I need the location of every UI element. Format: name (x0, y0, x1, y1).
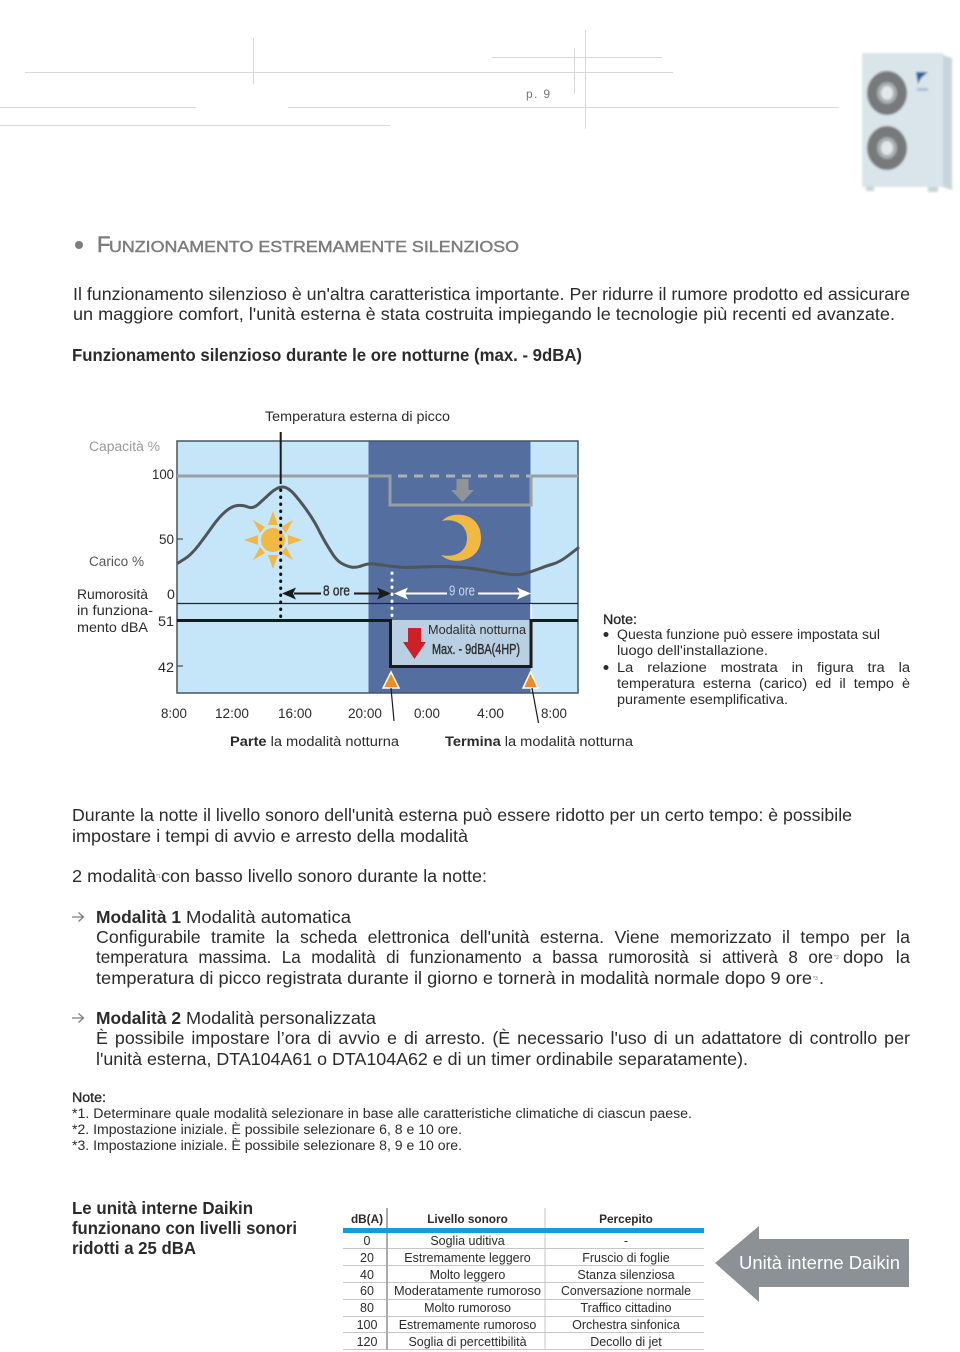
table rows: Soglia di percettibilità (408, 1335, 527, 1349)
table rows: Molto leggero (430, 1268, 505, 1282)
icon: sun (244, 511, 302, 569)
icon: capacity down arrow (451, 479, 474, 502)
axis labels: in funziona- (77, 603, 153, 619)
indoor units heading: funzionano con livelli sonori (72, 1218, 297, 1238)
arrow: 8 hours (282, 584, 391, 600)
night mode label: Modalità notturna (428, 622, 527, 637)
axis labels: Carico % (89, 554, 144, 570)
time axis: 0:00 (414, 706, 440, 722)
night mode label (428, 622, 527, 658)
table rows: 40 (360, 1268, 374, 1282)
time axis (161, 706, 567, 722)
intro paragraph: un maggiore comfort, l'unità esterna è stata costruita impiegando le tecnologie più recenti ed avanzate. (73, 304, 895, 324)
chart notes: Note: (603, 612, 637, 628)
footnotes (72, 1090, 692, 1154)
axis labels: 50 (159, 532, 174, 548)
mode 1 block: temperatura di picco registrata durante il giorno e tornerà in modalità normale dopo 9 ore (96, 968, 812, 988)
icon: arrow (72, 912, 84, 922)
footnotes: *1. Determinare quale modalità selezionare in base alle caratteristiche climatiche di ciascun paese. (72, 1106, 692, 1122)
capacity line (177, 476, 578, 505)
load curve (178, 487, 578, 575)
table rows: 60 (360, 1284, 374, 1298)
table rows: 20 (360, 1251, 374, 1265)
intro paragraph: Il funzionamento silenzioso è un'altra caratteristica importante. Per ridurre il rumore prodotto ed assicurare (73, 284, 910, 304)
table rows: 100 (357, 1318, 377, 1332)
time axis: 8:00 (161, 706, 187, 722)
mode 1 block: Configurabile tramite la scheda elettronica dell'unità esterna. Viene memorizzato il tempo per la (96, 927, 910, 947)
time axis: 8:00 (541, 706, 567, 722)
mode 1 block: *3 (813, 976, 818, 982)
chart notes: luogo dell'installazione. (617, 643, 768, 659)
arrow: 8 hours: 8 ore (323, 584, 350, 600)
chart background panels (177, 441, 578, 693)
table rows: Stanza silenziosa (577, 1268, 675, 1282)
subheading: Funzionamento silenzioso durante le ore notturne (max. - 9dBA) (72, 345, 582, 365)
table rows: Estremamente rumoroso (399, 1318, 536, 1332)
table header: Percepito (599, 1212, 653, 1226)
arrow: 9 hours (394, 584, 531, 600)
mode 1 block (72, 907, 910, 988)
icon: arrow (72, 1014, 84, 1022)
footnotes: *3. Impostazione iniziale. È possibile selezionare 8, 9 e 10 ore. (72, 1137, 462, 1154)
time axis: 12:00 (215, 706, 249, 722)
mode 1 block: *2 (834, 955, 839, 961)
start marker (383, 672, 399, 721)
table rows: Decollo di jet (590, 1335, 662, 1349)
chart notes: temperatura esterna (carico) ed il tempo è (617, 676, 910, 692)
table rows: Traffico cittadino (580, 1301, 672, 1315)
table accent bar (343, 1228, 704, 1233)
chart notes: puramente esemplificativa. (617, 692, 788, 708)
mode 2 block: È possibile impostare l’ora di avvio e di arresto. (È necessario l'uso di un adattatore di controllo per (96, 1028, 910, 1048)
night mode label: Max. - 9dBA(4HP) (432, 642, 520, 658)
table header: dB(A) (351, 1212, 383, 1226)
mode 1 block: temperatura massima. La modalità di funzionamento a bassa rumorosità si attiverà 8 ore (96, 947, 833, 967)
table rows: Moderatamente rumoroso (394, 1284, 541, 1298)
indoor units heading: Le unità interne Daikin (72, 1198, 253, 1218)
axis labels: Capacità % (89, 439, 160, 455)
end marker (523, 672, 538, 723)
heading (75, 232, 519, 257)
axis labels: mento dBA (77, 620, 149, 636)
axis labels: 100 (152, 467, 174, 483)
table rows: Estremamente leggero (404, 1251, 531, 1265)
description paragraph: impostare i tempi di avvio e arresto della modalità (72, 826, 468, 846)
indoor units heading: ridotti a 25 dBA (72, 1238, 196, 1258)
peak temperature label: Temperatura esterna di picco (265, 409, 450, 425)
axis labels: 0 (167, 587, 175, 603)
icon: red down arrow (403, 628, 426, 659)
chart notes: Questa funzione può essere impostata sul (617, 627, 880, 643)
footnotes: *2. Impostazione iniziale. È possibile selezionare 6, 8 e 10 ore. (72, 1121, 462, 1138)
indoor units heading (72, 1198, 297, 1258)
night mode start dotted line (390, 573, 394, 620)
axis labels: 42 (158, 660, 174, 676)
mode 2 block: Modalità personalizzata (186, 1008, 376, 1028)
description paragraph: con basso livello sonoro durante la notte: (161, 866, 487, 886)
table rows: Orchestra sinfonica (572, 1318, 680, 1332)
mode 2 block: Modalità 2 (96, 1008, 181, 1028)
time axis: 16:00 (278, 706, 312, 722)
sound level table (343, 1208, 704, 1350)
icon: outdoor unit photo (862, 53, 952, 192)
table rows (357, 1234, 691, 1349)
axis labels (77, 439, 175, 676)
table header (351, 1212, 653, 1226)
footnotes: Note: (72, 1090, 106, 1106)
mode 1 block: . (819, 968, 824, 988)
mode 1 block: Modalità 1 (96, 907, 181, 927)
start caption: Parte la modalità notturna (230, 734, 399, 750)
chart notes (603, 612, 910, 708)
peak temperature marker (280, 432, 282, 620)
table rows: - (624, 1234, 628, 1248)
mode 2 block (72, 1008, 910, 1069)
mode 2 block: l'unità esterna, DTA104A61 o DTA104A62 e di un timer ordinabile separatamente). (96, 1049, 748, 1069)
mode 1 block: dopo la (843, 947, 910, 967)
description paragraph: Durante la notte il livello sonoro dell'unità esterna può essere ridotto per un certo tempo: è possibile (72, 805, 852, 825)
arrow callout: indoor units (715, 1226, 909, 1302)
description paragraph (72, 805, 852, 886)
chart: night mode load and noise (77, 409, 633, 750)
time axis: 20:00 (348, 706, 382, 722)
table rows: Fruscio di foglie (582, 1251, 670, 1265)
heading: F (97, 232, 110, 257)
mode 1 block: Modalità automatica (186, 907, 351, 927)
table rows: Conversazione normale (561, 1284, 691, 1298)
arrow: 9 hours: 9 ore (449, 584, 475, 600)
icon: moon (441, 515, 481, 561)
table header: Livello sonoro (427, 1212, 508, 1226)
time axis: 4:00 (477, 706, 504, 722)
intro paragraph (73, 284, 910, 324)
description paragraph: 2 modalità (72, 866, 156, 886)
description paragraph: *1 (156, 874, 161, 880)
arrow callout: indoor units: Unità interne Daikin (739, 1253, 900, 1273)
table rows: 0 (364, 1234, 371, 1248)
table rows: 120 (357, 1335, 377, 1349)
table rows: Molto rumoroso (424, 1301, 511, 1315)
noise level lines (177, 604, 578, 666)
heading: UNZIONAMENTO ESTREMAMENTE SILENZIOSO (109, 239, 519, 256)
chart notes: La relazione mostrata in figura tra la (617, 660, 910, 676)
table rows: Soglia uditiva (430, 1234, 505, 1248)
page number: p. 9 (526, 87, 550, 101)
axis labels: Rumorosità (77, 587, 148, 603)
end caption: Termina la modalità notturna (445, 734, 633, 750)
axis labels: 51 (158, 614, 174, 630)
table rows: 80 (360, 1301, 374, 1315)
